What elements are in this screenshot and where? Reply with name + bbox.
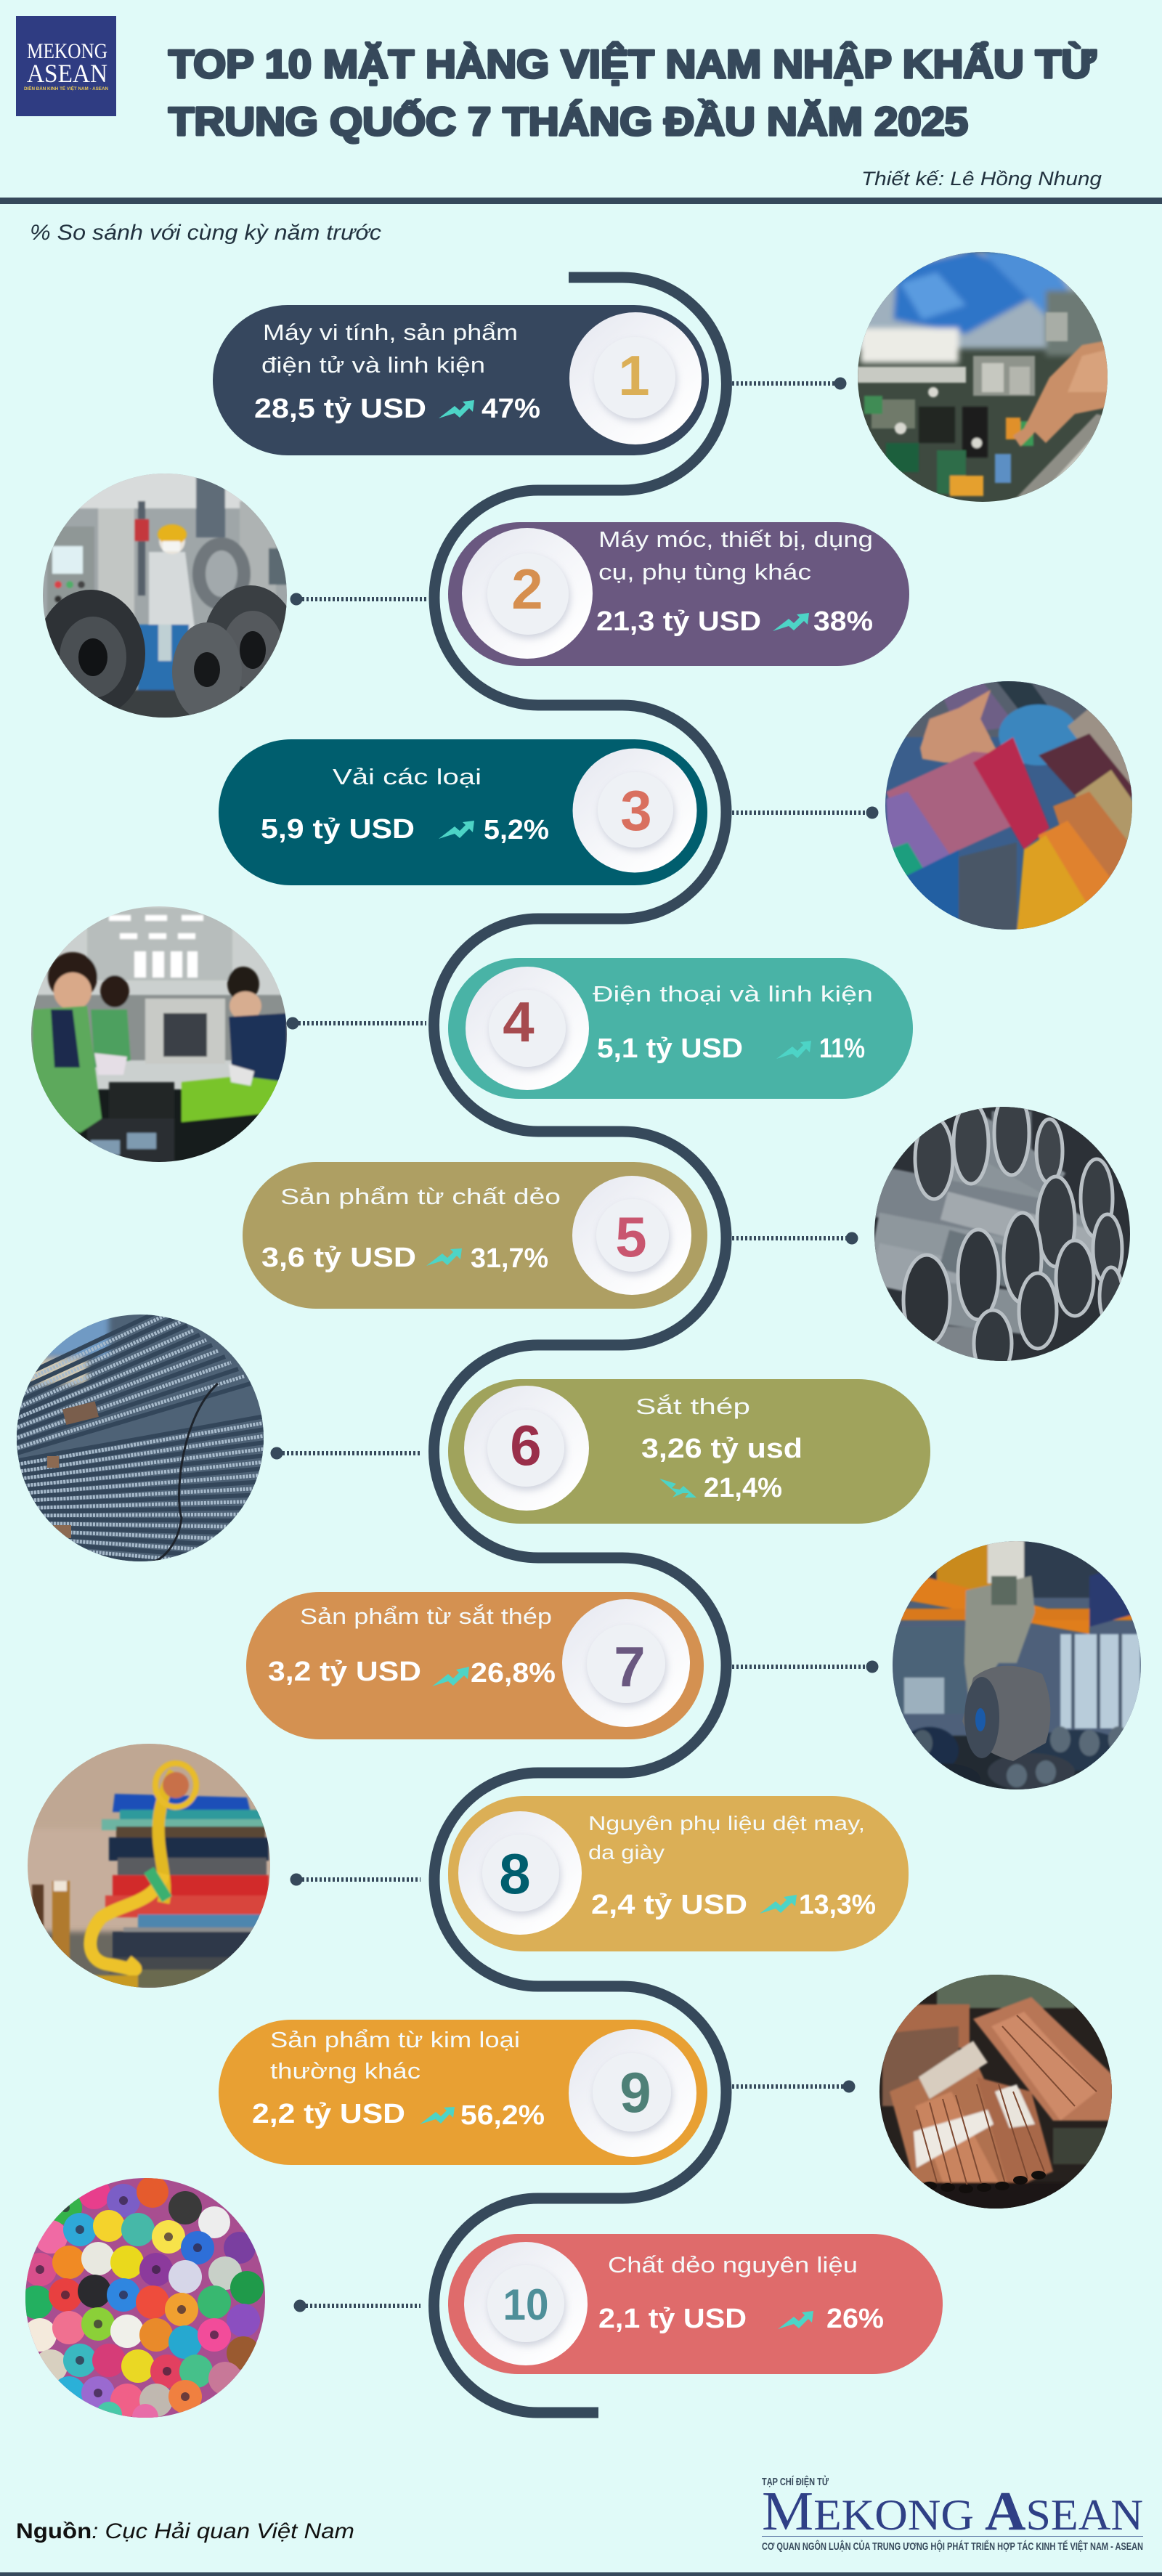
connector 1 <box>732 378 847 389</box>
panel: item 9 other metal products: 9 <box>619 2060 651 2124</box>
panel: item 7 steel products <box>246 1592 704 1739</box>
note: year on year comparison: % So sánh với cùng kỳ năm trước <box>30 221 381 245</box>
logo: Mekong Asean top badge <box>16 16 116 116</box>
photo 8: fabric stack with measuring tape <box>25 1742 272 1990</box>
panel: item 2 machinery: 21,3 tỷ USD <box>596 606 761 637</box>
panel: item 6 iron and steel: 6 <box>510 1413 542 1477</box>
connector 2 <box>290 593 426 606</box>
panel: item 5 plastic products: Sản phẩm từ chất dẻo <box>280 1184 561 1209</box>
panel: item 2 machinery: 38% <box>813 606 873 637</box>
logo: Mekong Asean footer masthead: ASEAN <box>985 2481 1143 2542</box>
connector 5 <box>732 1232 858 1245</box>
panel: item 5 plastic products: 5 <box>615 1205 647 1269</box>
panel: item 2 machinery: Máy móc, thiết bị, dụng <box>598 527 873 552</box>
panel: item 1 computers: điện tử và linh kiện <box>261 352 485 378</box>
panel: item 5 plastic products: 3,6 tỷ USD <box>261 1243 416 1273</box>
title: TRUNG QUỐC 7 THÁNG ĐẦU NĂM 2025 <box>168 99 968 144</box>
panel: item 1 computers <box>213 305 709 455</box>
panel: item 8 textile materials <box>448 1796 909 1951</box>
panel: item 4 phones: 4 <box>503 990 535 1054</box>
connector 6 <box>270 1447 420 1460</box>
photo 2: machinery factory worker <box>36 472 298 723</box>
photo 1: electronics board with hand <box>857 251 1111 505</box>
panel: item 3 fabrics <box>219 739 707 885</box>
panel: item 5 plastic products: 31,7% <box>471 1243 548 1274</box>
panel: item 3 fabrics: 3 <box>620 779 652 842</box>
serpentine path <box>434 277 726 2413</box>
title <box>168 41 1096 144</box>
panel: item 7 steel products: 26,8% <box>471 1658 556 1689</box>
panel: item 4 phones: 11% <box>819 1033 865 1064</box>
connector 7 <box>732 1660 879 1673</box>
panel: item 4 phones: 5,1 tỷ USD <box>597 1033 743 1064</box>
connector 10 <box>293 2299 420 2312</box>
connector 4 <box>286 1017 426 1030</box>
panel: item 9 other metal products: Sản phẩm từ kim loại <box>270 2027 520 2052</box>
panel: item 6 iron and steel <box>448 1379 930 1524</box>
logo: Mekong Asean footer masthead: TẠP CHÍ ĐIỆN TỬ <box>762 2475 829 2488</box>
title: TOP 10 MẶT HÀNG VIỆT NAM NHẬP KHẨU TỪ <box>168 41 1096 86</box>
panel: item 6 iron and steel: Sắt thép <box>635 1394 750 1419</box>
panel: item 1 computers: Máy vi tính, sản phẩm <box>263 320 518 345</box>
panel: item 8 textile materials: 13,3% <box>799 1890 876 1920</box>
panel: item 8 textile materials: 2,4 tỷ USD <box>591 1890 747 1920</box>
panel: item 2 machinery: cụ, phụ tùng khác <box>598 559 811 585</box>
source note: Nguồn : Cục Hải quan Việt Nam <box>16 2519 354 2543</box>
photo 9: copper tubes <box>875 1972 1115 2211</box>
photo 4: phone assembly workers <box>29 904 290 1169</box>
panel: item 8 textile materials: Nguyên phụ liệu dệt may, <box>588 1812 865 1835</box>
panel: item 1 computers: 47% <box>482 394 540 424</box>
panel: item 8 textile materials: 8 <box>499 1842 531 1906</box>
panel: item 6 iron and steel: 21,4% <box>704 1473 782 1503</box>
panel: item 3 fabrics: Vải các loại <box>333 764 482 789</box>
connector 8 <box>290 1874 420 1885</box>
panel: item 3 fabrics: 5,2% <box>484 815 549 845</box>
logo: Mekong Asean top badge: MEKONG <box>27 39 107 63</box>
panel: item 9 other metal products: thường khác <box>270 2058 420 2084</box>
panel: item 10 plastic materials: 2,1 tỷ USD <box>598 2304 747 2334</box>
panel: item 1 computers: 1 <box>618 344 650 407</box>
panel: item 7 steel products: 3,2 tỷ USD <box>268 1657 421 1687</box>
panel: item 2 machinery <box>448 522 909 666</box>
panel: item 4 phones <box>448 958 913 1099</box>
logo: Mekong Asean top badge: DIỄN ĐÀN KINH TẾ VIỆT NAM - ASEAN <box>24 86 108 92</box>
connector 3 <box>732 806 879 819</box>
panel: item 10 plastic materials <box>448 2234 943 2374</box>
photo 6: steel rebar bundles <box>15 1311 265 1569</box>
connector 9 <box>732 2080 856 2093</box>
panel: item 7 steel products: 7 <box>614 1635 646 1699</box>
panel: item 10 plastic materials: 26% <box>826 2304 884 2334</box>
logo: Mekong Asean footer masthead <box>762 2475 1143 2553</box>
panel: item 8 textile materials: da giày <box>588 1841 665 1864</box>
photo 3: fabric swatches <box>882 679 1140 933</box>
panel: item 4 phones: Điện thoại và linh kiện <box>593 981 873 1007</box>
logo: Mekong Asean footer masthead: MEKONG <box>762 2481 974 2542</box>
logo: Mekong Asean top badge: ASEAN <box>27 59 107 88</box>
panel: item 6 iron and steel: 3,26 tỷ usd <box>641 1434 803 1464</box>
panel: item 2 machinery: 2 <box>511 557 543 621</box>
panel: item 10 plastic materials: 10 <box>503 2280 549 2329</box>
designer credit: Thiết kế: Lê Hồng Nhung <box>861 168 1102 190</box>
panel: item 5 plastic products <box>243 1162 707 1309</box>
panel: item 9 other metal products <box>219 2020 707 2165</box>
photo 7: steel coil warehouse <box>890 1540 1144 1795</box>
panel: item 7 steel products: Sản phẩm từ sắt thép <box>300 1604 552 1629</box>
panel: item 1 computers: 28,5 tỷ USD <box>254 394 426 424</box>
panel: item 10 plastic materials: Chất dẻo nguyên liệu <box>608 2252 858 2278</box>
panel: item 9 other metal products: 56,2% <box>460 2100 545 2131</box>
photo 10: colourful plastic beads <box>20 2175 269 2430</box>
panel: item 9 other metal products: 2,2 tỷ USD <box>252 2099 405 2129</box>
panel: item 3 fabrics: 5,9 tỷ USD <box>261 814 415 845</box>
photo 5: plastic pipes <box>874 1107 1130 1361</box>
